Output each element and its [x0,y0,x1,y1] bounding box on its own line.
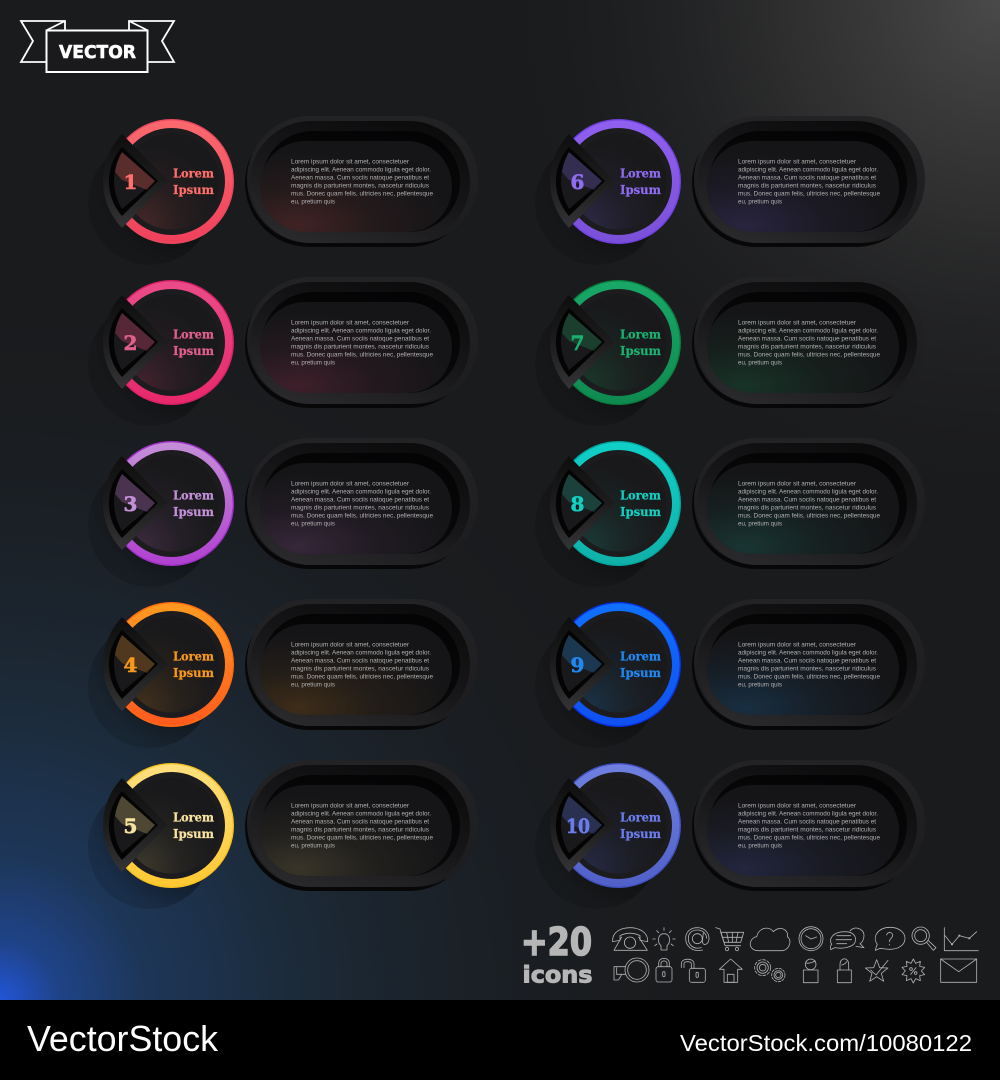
panel: item 6 [535,116,925,265]
text pill 4 [245,599,478,730]
heading: +20 icons [521,920,592,988]
text pill 2: adipiscing elit. Aenean commodo ligula eget dolor. [291,327,431,334]
text pill 7: Aenean massa. Cum sociis natoque penatibus et [738,335,876,342]
badge 10 with ring and number [535,764,680,909]
badge 3 with ring and number: Lorem [173,488,214,502]
text pill 2: magnis dis parturient montes, nascetur ridiculus [291,343,429,350]
text pill 4: magnis dis parturient montes, nascetur ridiculus [291,665,429,672]
text pill 10: mus. Donec quam felis, ultricies nec, pellentesque [738,834,880,841]
panel: item 9 [535,599,925,748]
badge 4 with ring and number: Ipsum [173,665,214,680]
footer band [0,1000,1000,1080]
badge 5 with ring and number [88,764,233,909]
text pill 4: Lorem ipsum dolor sit amet, consectetuer [291,641,410,648]
text pill 9: magnis dis parturient montes, nascetur ridiculus [738,665,876,672]
text pill 5: eu, pretium quis [291,842,335,849]
icon: gears [755,960,785,982]
icon: clock [799,927,823,951]
badge 2 with ring and number: Lorem [173,326,214,342]
panel: item 2 [88,277,478,426]
text pill 3: eu, pretium quis [291,520,335,527]
badge 1 with ring and number: Lorem [173,166,214,180]
badge 6 with ring and number: 6 [571,170,584,194]
badge 5 with ring and number: Lorem [173,810,214,824]
badge 2 with ring and number: 2 [124,331,137,355]
text pill 2: mus. Donec quam felis, ultricies nec, pellentesque [291,351,433,358]
icon: at sign [686,928,709,950]
text pill 8: mus. Donec quam felis, ultricies nec, pellentesque [738,512,880,519]
text pill 6: eu, pretium quis [738,198,782,205]
badge 1 with ring and number: 1 [124,170,137,194]
text pill 10: magnis dis parturient montes, nascetur ridiculus [738,826,876,833]
panel: item 10 [535,760,925,909]
text pill 2 [245,277,478,408]
text pill 6: adipiscing elit. Aenean commodo ligula eget dolor. [738,166,878,173]
badge 8 with ring and number: Ipsum [620,504,661,519]
badge 10 with ring and number: Lorem [620,810,661,824]
footer band: VectorStock.com/10080122 [680,1030,972,1056]
text pill 5: Lorem ipsum dolor sit amet, consectetuer [291,802,410,809]
text pill 7: eu, pretium quis [738,359,782,366]
icon: envelope [941,959,977,982]
text pill 3: magnis dis parturient montes, nascetur ridiculus [291,504,429,511]
badge 4 with ring and number [88,603,233,748]
text pill 9: eu, pretium quis [738,681,782,688]
badge 9 with ring and number [535,603,680,748]
badge 7 with ring and number: Lorem [620,326,661,342]
text pill 1: Aenean massa. Cum sociis natoque penatibus et [291,174,429,181]
text pill 6 [692,116,925,247]
heading: +20 icons: icons [522,962,592,988]
badge: VECTOR ribbon [21,21,174,72]
text pill 5: adipiscing elit. Aenean commodo ligula eget dolor. [291,810,431,817]
icon: house [719,959,742,982]
badge 9 with ring and number: Ipsum [620,665,661,680]
heading: +20 icons: +20 [521,920,592,964]
icon: chat bubbles [830,928,864,950]
text pill 10: eu, pretium quis [738,842,782,849]
text pill 1: Lorem ipsum dolor sit amet, consectetuer [291,158,410,165]
icon: key [614,958,649,982]
badge 10 with ring and number: Ipsum [620,826,661,841]
badge 5 with ring and number: 5 [124,814,137,838]
badge 9 with ring and number: Lorem [620,648,661,664]
text pill 8: Aenean massa. Cum sociis natoque penatibus et [738,496,876,503]
icon: cloud [750,928,790,951]
icon set [613,927,978,983]
badge 2 with ring and number [88,281,233,426]
text pill 10: adipiscing elit. Aenean commodo ligula eget dolor. [738,810,878,817]
badge: VECTOR ribbon: VECTOR [59,42,136,63]
text pill 3: mus. Donec quam felis, ultricies nec, pellentesque [291,512,433,519]
text pill 8: magnis dis parturient montes, nascetur ridiculus [738,504,876,511]
text pill 5: mus. Donec quam felis, ultricies nec, pellentesque [291,834,433,841]
text pill 1: mus. Donec quam felis, ultricies nec, pellentesque [291,190,433,197]
text pill 3: Lorem ipsum dolor sit amet, consectetuer [291,480,410,487]
icon: star with check [865,960,888,981]
icon: light bulb [653,928,675,950]
icon: percent badge [902,959,925,983]
badge 3 with ring and number [88,442,233,587]
text pill 5: magnis dis parturient montes, nascetur ridiculus [291,826,429,833]
icon: magnifier [912,927,936,950]
text pill 2: Lorem ipsum dolor sit amet, consectetuer [291,319,410,326]
text pill 5: Aenean massa. Cum sociis natoque penatibus et [291,818,429,825]
badge 1 with ring and number: Ipsum [173,182,214,197]
panel: item 1 [88,116,478,265]
text pill 7: mus. Donec quam felis, ultricies nec, pellentesque [738,351,880,358]
text pill 4: mus. Donec quam felis, ultricies nec, pellentesque [291,673,433,680]
text pill 10 [692,760,925,891]
badge 7 with ring and number: 7 [571,331,584,355]
text pill 1: eu, pretium quis [291,198,335,205]
badge 6 with ring and number [535,120,680,265]
text pill 8 [692,438,925,569]
text pill 3: adipiscing elit. Aenean commodo ligula eget dolor. [291,488,431,495]
icon: closed lock [656,958,672,982]
badge 4 with ring and number: 4 [124,653,138,677]
text pill 4: Aenean massa. Cum sociis natoque penatibus et [291,657,429,664]
text pill 4: eu, pretium quis [291,681,335,688]
badge 3 with ring and number: 3 [124,492,137,516]
badge 5 with ring and number: Ipsum [173,826,214,841]
text pill 9: mus. Donec quam felis, ultricies nec, pellentesque [738,673,880,680]
text pill 1 [245,116,478,247]
icon: question bubble [875,927,905,950]
text pill 2: eu, pretium quis [291,359,335,366]
badge 9 with ring and number: 9 [571,653,584,677]
panel: item 4 [88,599,478,748]
icon: man [803,959,818,983]
text pill 8: Lorem ipsum dolor sit amet, consectetuer [738,480,857,487]
text pill 6: Lorem ipsum dolor sit amet, consectetuer [738,158,857,165]
panel: item 5 [88,760,478,909]
badge 8 with ring and number: 8 [571,492,584,516]
text pill 6: magnis dis parturient montes, nascetur ridiculus [738,182,876,189]
text pill 10: Lorem ipsum dolor sit amet, consectetuer [738,802,857,809]
footer band: VectorStock [27,1018,219,1059]
icon: telephone [613,928,648,950]
text pill 10: Aenean massa. Cum sociis natoque penatibus et [738,818,876,825]
text pill 8: adipiscing elit. Aenean commodo ligula eget dolor. [738,488,878,495]
text pill 7: Lorem ipsum dolor sit amet, consectetuer [738,319,857,326]
badge 6 with ring and number: Lorem [620,166,661,180]
text pill 8: eu, pretium quis [738,520,782,527]
text pill 9: adipiscing elit. Aenean commodo ligula eget dolor. [738,649,878,656]
icon: woman [837,959,851,983]
text pill 9: Aenean massa. Cum sociis natoque penatibus et [738,657,876,664]
text pill 9: Lorem ipsum dolor sit amet, consectetuer [738,641,857,648]
text pill 6: mus. Donec quam felis, ultricies nec, pellentesque [738,190,880,197]
badge 6 with ring and number: Ipsum [620,182,661,197]
text pill 3 [245,438,478,569]
text pill 5 [245,760,478,891]
icon: open lock [681,959,705,982]
panel: item 8 [535,438,925,587]
text pill 3: Aenean massa. Cum sociis natoque penatibus et [291,496,429,503]
badge 7 with ring and number [535,281,680,426]
badge 8 with ring and number: Lorem [620,488,661,502]
badge 4 with ring and number: Lorem [173,648,214,664]
badge 2 with ring and number: Ipsum [173,343,214,358]
icon: shopping cart [716,928,744,951]
text pill 7 [692,277,925,408]
panel: item 7 [535,277,925,426]
badge 10 with ring and number: 10 [566,814,590,838]
panel: item 3 [88,438,478,587]
text pill 7: magnis dis parturient montes, nascetur ridiculus [738,343,876,350]
text pill 4: adipiscing elit. Aenean commodo ligula eget dolor. [291,649,431,656]
text pill 1: adipiscing elit. Aenean commodo ligula eget dolor. [291,166,431,173]
text pill 6: Aenean massa. Cum sociis natoque penatibus et [738,174,876,181]
badge 1 with ring and number [88,120,233,265]
badge 8 with ring and number [535,442,680,587]
text pill 9 [692,599,925,730]
text pill 7: adipiscing elit. Aenean commodo ligula eget dolor. [738,327,878,334]
text pill 1: magnis dis parturient montes, nascetur ridiculus [291,182,429,189]
text pill 2: Aenean massa. Cum sociis natoque penatibus et [291,335,429,342]
badge 3 with ring and number: Ipsum [173,504,214,519]
badge 7 with ring and number: Ipsum [620,343,661,358]
icon: line chart [944,928,978,951]
